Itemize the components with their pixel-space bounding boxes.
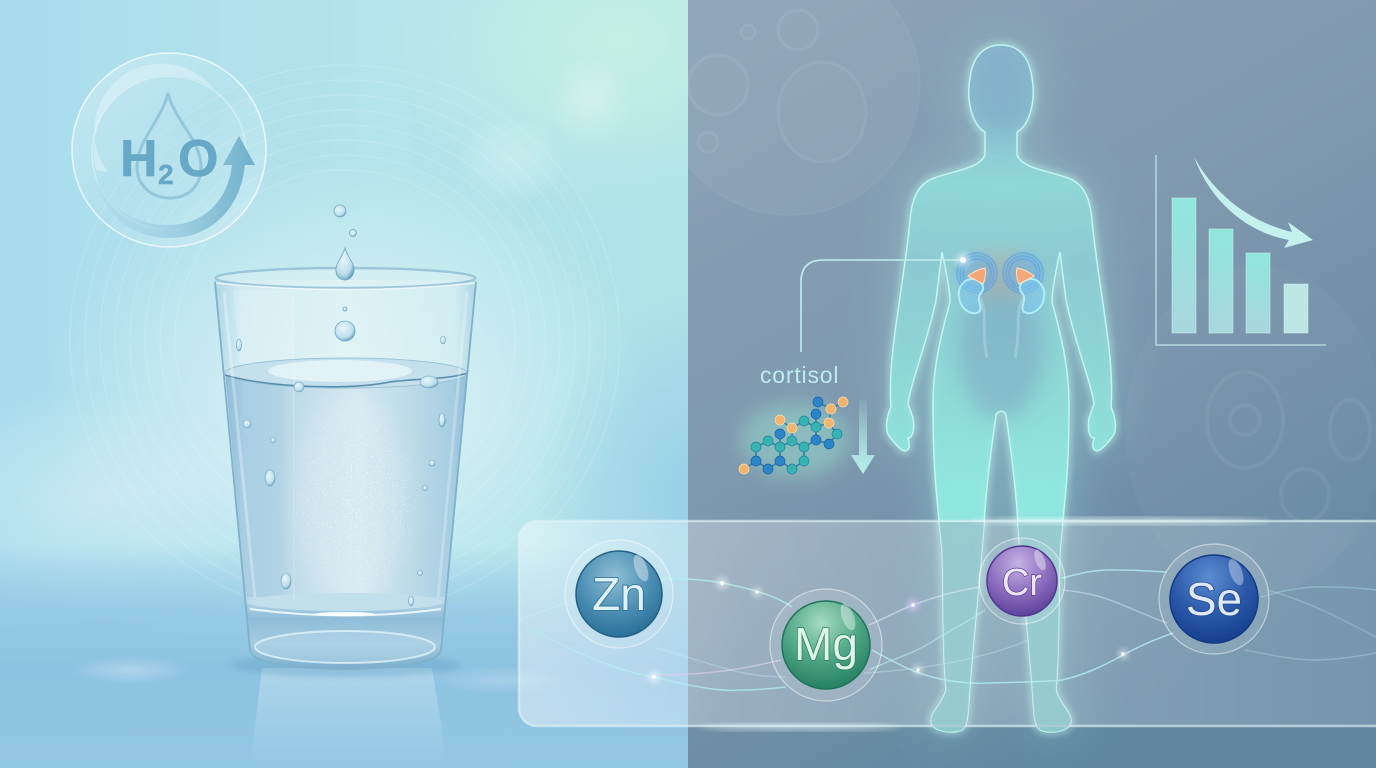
bar chart: declining trend bbox=[1156, 155, 1326, 345]
arrow: downward trend bbox=[1194, 157, 1313, 248]
mineral: chromium: Cr bbox=[1002, 562, 1042, 604]
connecting waves bbox=[520, 570, 1376, 690]
H2O label: H bbox=[120, 130, 158, 188]
drop outline bbox=[137, 93, 201, 198]
upper glass bbox=[215, 280, 476, 373]
callout line to adrenal gland bbox=[801, 253, 970, 352]
mineral: chromium bbox=[979, 538, 1065, 624]
specks bbox=[288, 406, 424, 593]
inner ring bbox=[94, 64, 215, 172]
glass of water bbox=[215, 268, 476, 677]
mineral: selenium: Se bbox=[1186, 573, 1242, 625]
H2O label: O bbox=[178, 130, 218, 188]
mineral: zinc: Zn bbox=[592, 568, 646, 620]
falling water drops bbox=[334, 205, 356, 341]
H2O label: 2 bbox=[158, 159, 174, 190]
water body bbox=[225, 373, 468, 600]
mineral: selenium bbox=[1159, 544, 1269, 654]
mineral: magnesium: Mg bbox=[794, 618, 858, 670]
arrow: cortisol decreases bbox=[851, 400, 875, 474]
circular arrow bbox=[96, 136, 255, 238]
thick base bbox=[246, 597, 445, 669]
water surface bbox=[225, 358, 467, 388]
panel: minerals bbox=[519, 518, 1376, 734]
panel: water background bbox=[0, 0, 688, 768]
water beads on glass bbox=[236, 336, 446, 606]
cortisol label: cortisol bbox=[760, 362, 839, 388]
kidneys and adrenal glands bbox=[957, 253, 1044, 358]
reflection of glass bbox=[250, 668, 448, 768]
panel: body background bbox=[660, 0, 1376, 768]
glass walls and rim bbox=[215, 282, 476, 669]
H2O label bbox=[120, 130, 218, 190]
mineral: magnesium bbox=[770, 589, 882, 701]
icon: H2O badge bbox=[72, 53, 266, 247]
figure: human body bbox=[887, 45, 1115, 732]
sparkles bbox=[648, 577, 1128, 683]
mineral: zinc bbox=[565, 540, 673, 648]
icon: cortisol molecule bbox=[739, 397, 850, 478]
